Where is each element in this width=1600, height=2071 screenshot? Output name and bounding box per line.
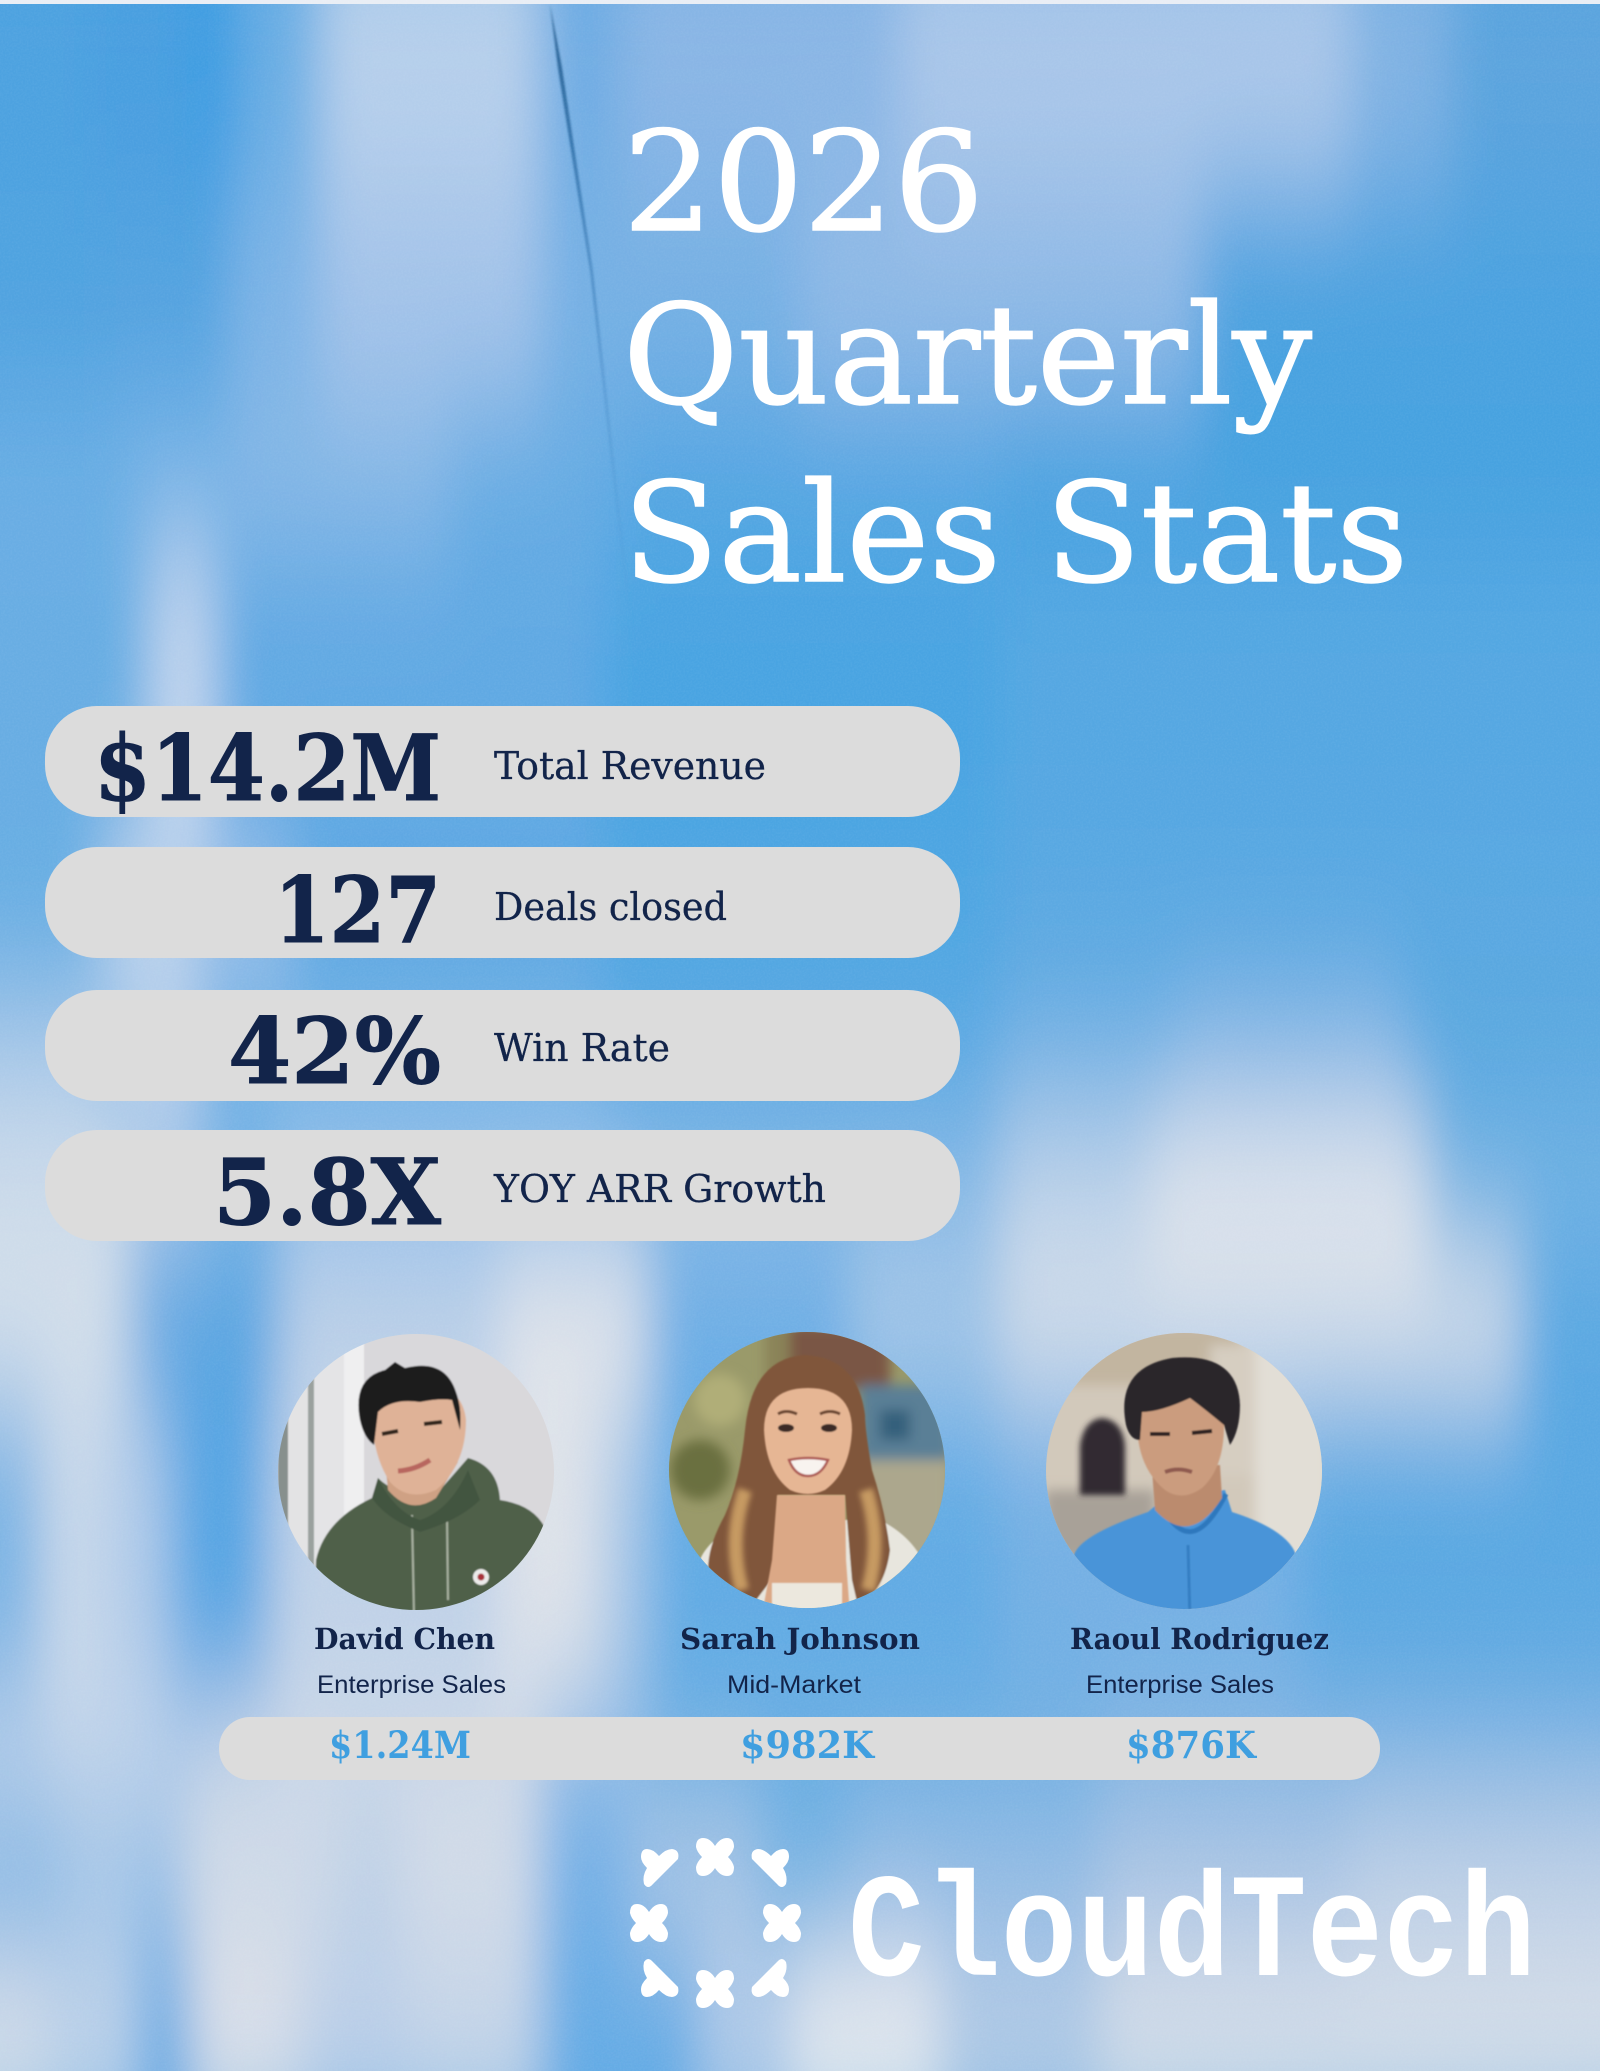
stat pill: win rate: 42% <box>228 999 441 1105</box>
shirt <box>1068 1490 1300 1625</box>
top edge highlight <box>0 0 1600 4</box>
portrait: Sarah Johnson <box>669 1332 945 1608</box>
team member: Raoul Rodriguez: Enterprise Sales <box>1086 1671 1274 1699</box>
hair <box>358 1362 460 1445</box>
stat pill: deals closed: 127 <box>274 858 441 964</box>
title: Quarterly <box>623 275 1312 436</box>
hair back <box>708 1355 890 1608</box>
hoodie <box>314 1458 546 1625</box>
title <box>623 102 1408 614</box>
hair <box>1124 1357 1240 1445</box>
team member: Sarah Johnson <box>680 1622 920 1699</box>
hair highlights <box>736 1490 875 1590</box>
stat pill: total revenue: Total Revenue <box>494 744 766 788</box>
team member: Raoul Rodriguez <box>1070 1622 1329 1699</box>
jacket <box>700 1519 918 1608</box>
sales figures bar: $876K <box>1126 1723 1258 1767</box>
team member: Sarah Johnson: Sarah Johnson <box>680 1622 920 1656</box>
face <box>1137 1398 1224 1496</box>
neck <box>1152 1465 1222 1526</box>
stat pill: win rate: Win Rate <box>494 1026 670 1070</box>
sales figures bar <box>219 1717 1380 1780</box>
background crease line <box>550 4 640 690</box>
stat pill: win rate <box>45 990 960 1105</box>
sales figures bar: $982K <box>740 1723 876 1767</box>
stat pill: deals closed: Deals closed <box>494 885 727 929</box>
icon: CloudTech logo mark <box>630 1838 801 2008</box>
eyes and mouth <box>382 1422 442 1434</box>
title: Sales Stats <box>623 453 1408 614</box>
eyes and smile <box>778 1424 794 1432</box>
face <box>764 1388 852 1494</box>
stat pill: YOY ARR growth <box>45 1130 960 1246</box>
sales figures bar: $1.24M <box>329 1723 471 1767</box>
stat pill: total revenue: $14.2M <box>94 716 441 822</box>
neck and face <box>385 1460 458 1505</box>
team member: Raoul Rodriguez: Raoul Rodriguez <box>1070 1622 1329 1656</box>
team member: David Chen <box>314 1622 506 1699</box>
stat pill: YOY ARR growth: 5.8X <box>213 1140 441 1246</box>
logo on hoodie <box>473 1569 489 1585</box>
stat pill: total revenue <box>45 706 960 822</box>
portrait: Raoul Rodriguez <box>1040 1325 1330 1625</box>
title: 2026 <box>623 102 984 263</box>
eyes and mouth <box>1150 1431 1212 1434</box>
team member: Sarah Johnson: Mid-Market <box>727 1671 861 1699</box>
team member: David Chen: David Chen <box>314 1622 495 1656</box>
team member: David Chen: Enterprise Sales <box>317 1671 506 1699</box>
stat pill: deals closed <box>45 847 960 964</box>
portrait: David Chen <box>278 1334 554 1610</box>
chest and top <box>762 1495 850 1615</box>
stat pill: YOY ARR growth: YOY ARR Growth <box>493 1167 826 1211</box>
